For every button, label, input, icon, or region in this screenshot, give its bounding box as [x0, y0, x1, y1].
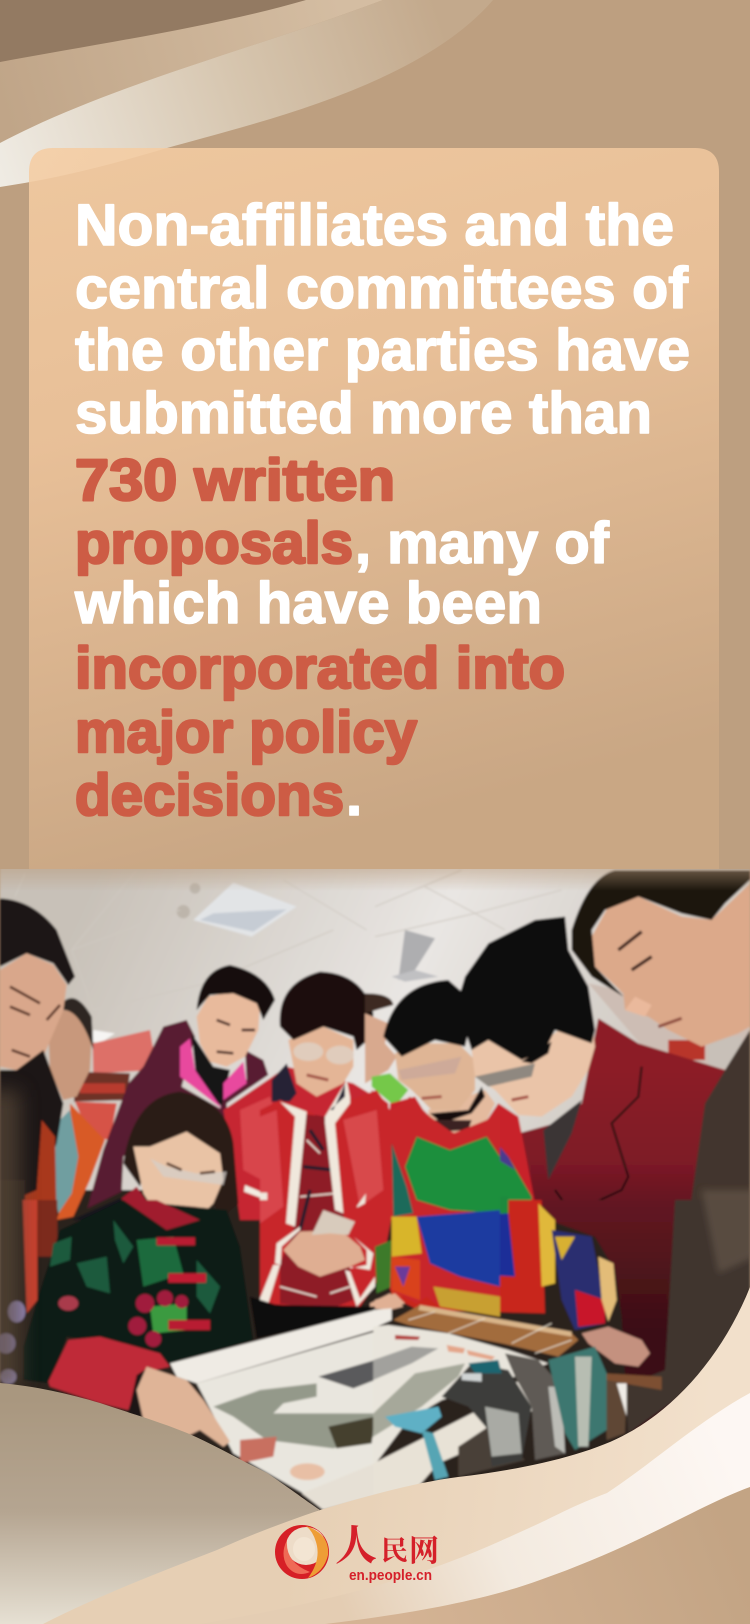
- woman: far left: [0, 898, 75, 1220]
- heading text block: 730 written: [75, 448, 395, 513]
- heading text block: .: [346, 763, 362, 828]
- scroll, left part: [170, 1297, 375, 1510]
- woman: seated in front: [72, 1092, 238, 1220]
- left fade: [0, 1090, 20, 1390]
- woman: red wool coat: [518, 1018, 725, 1220]
- heading text block: submitted more than: [75, 381, 652, 446]
- left half, lower: [0, 1180, 253, 1624]
- seated woman: patterned jacket: [23, 1200, 253, 1447]
- heading text block: the other parties have: [75, 318, 690, 383]
- heading text block: , many of: [355, 511, 610, 576]
- logo wordmark: 网: [409, 1526, 439, 1570]
- bottom wave: tan corner: [325, 1487, 750, 1624]
- heading text block: which have been: [74, 571, 542, 636]
- red puffer lower, left edge: [76, 1600, 100, 1624]
- right half, lower: [388, 1190, 750, 1433]
- woman: second from left: [48, 998, 105, 1220]
- heading text block: central committees of: [75, 256, 689, 321]
- pointing fingertip over embroidery: [216, 1421, 230, 1444]
- logo: people.cn: [275, 1513, 439, 1584]
- purple flowers: [0, 1301, 25, 1384]
- woman: colourful top: [383, 980, 538, 1220]
- heading text block: [74, 193, 690, 828]
- top decorative swoosh: [0, 0, 493, 187]
- logo wordmark: [335, 1513, 439, 1573]
- ceiling light and fittings: [193, 883, 297, 937]
- photo: women examining embroidery scroll: [0, 869, 750, 1511]
- heading text block: decisions: [75, 763, 344, 828]
- heading text block: incorporated into: [75, 636, 565, 701]
- top fade: [0, 869, 750, 888]
- loom: [393, 1305, 662, 1440]
- woman: behind, green scarf: [365, 993, 408, 1107]
- right half, upper: [365, 870, 750, 1220]
- bottom wave: grey-tan left: [0, 1383, 320, 1624]
- logo emblem: [275, 1525, 329, 1579]
- logo wordmark: 民: [381, 1529, 408, 1568]
- scroll and loom: [375, 1293, 662, 1440]
- heading text block: proposals: [75, 511, 353, 576]
- woman: big dark hair: [455, 917, 595, 1117]
- bottom wave: white: [200, 1393, 750, 1624]
- hem green and skin: [375, 1293, 405, 1310]
- scroll, right part: [373, 1308, 607, 1497]
- dark coat: [690, 1030, 750, 1201]
- colourful top lower: [388, 1197, 617, 1330]
- red puffer sleeve: [370, 1090, 390, 1109]
- panel: text card: [29, 148, 719, 869]
- woman: maroon coat and pink scarf: [87, 965, 275, 1208]
- logo wordmark: 人: [335, 1513, 377, 1573]
- bottom wave: cream: [0, 1287, 750, 1624]
- left half, upper: [0, 870, 375, 1220]
- thread bundles: [442, 1347, 607, 1467]
- woman: red puffer jacket: [223, 972, 375, 1220]
- dark maroon coat and grey vignette: [555, 1198, 675, 1427]
- cuff: [48, 1337, 170, 1410]
- heading text block: major policy: [75, 700, 417, 765]
- middle: puffer jacket and colourful top detail: [260, 1090, 500, 1330]
- hand on loom: [582, 1327, 650, 1367]
- heading text block: Non-affiliates and the: [75, 193, 674, 258]
- logo url: en.people.cn: [349, 1568, 432, 1584]
- pointing hand: [134, 1365, 204, 1436]
- woman: top right: [572, 870, 750, 1220]
